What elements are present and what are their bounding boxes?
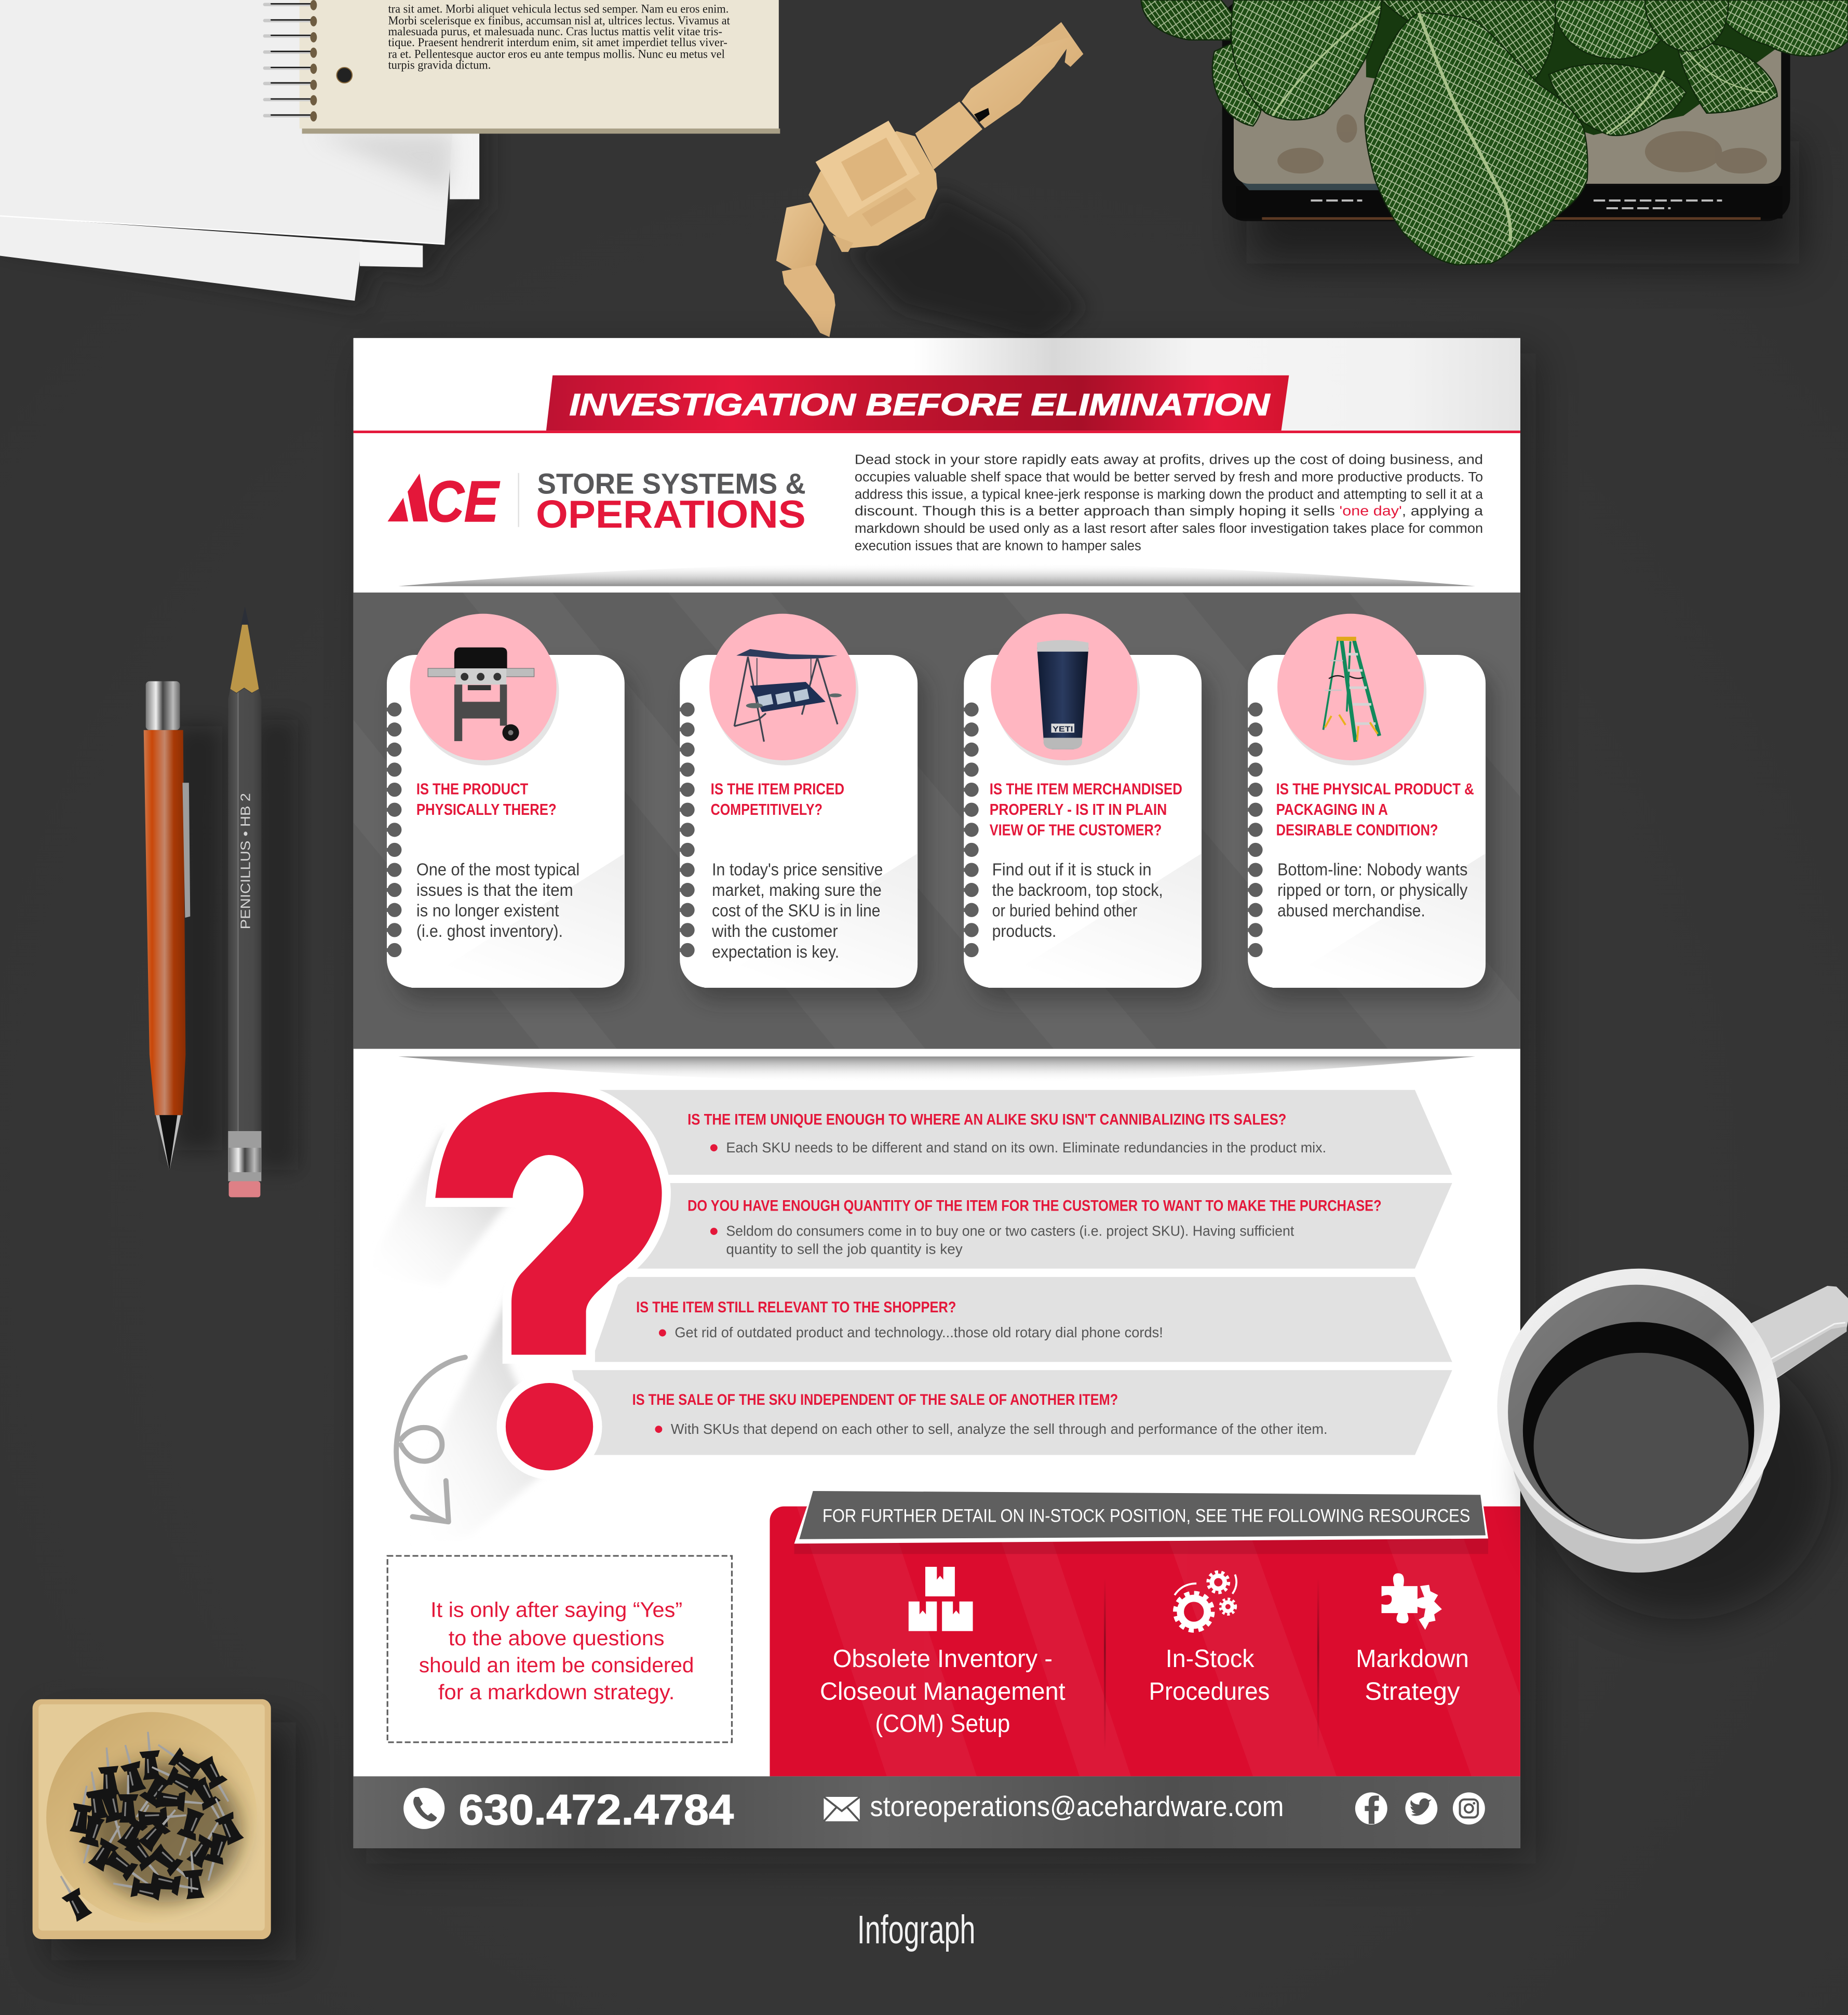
card heading: PROPERLY - IS IT IN PLAIN xyxy=(990,801,1167,818)
question strip 4 xyxy=(572,1370,1452,1455)
grey product panel xyxy=(354,593,1520,1049)
resource: obsolete inventory: (COM) Setup xyxy=(875,1710,1010,1738)
red title banner xyxy=(546,375,1289,431)
graphite pencil xyxy=(228,607,298,1197)
red rule xyxy=(354,431,1520,433)
large red question mark xyxy=(435,1092,662,1470)
icon: puzzle piece with gear arrow xyxy=(1382,1573,1429,1623)
question strip 2: Seldom do consumers come in to buy one or two casters (i.e. project SKU). Having sufficient xyxy=(726,1223,1294,1239)
icon: envelope xyxy=(824,1797,860,1821)
question strip 3: Get rid of outdated product and technology...those old rotary dial phone cords! xyxy=(675,1324,1163,1340)
dashed callout box: to the above questions xyxy=(449,1626,665,1650)
intro paragraph: execution issues that are known to hamper sales xyxy=(855,538,1141,553)
stack of loose white paper sheets xyxy=(0,0,488,308)
question mark long shadow xyxy=(362,1131,552,1549)
question strip 1: Each SKU needs to be different and stand on its own. Eliminate redundancies in the product mix. xyxy=(726,1139,1326,1156)
resource: in-stock procedures: In-Stock xyxy=(1166,1645,1255,1673)
card heading: COMPETITIVELY? xyxy=(711,801,822,818)
card text: is no longer existent xyxy=(416,902,559,921)
binder holes xyxy=(964,703,979,957)
spiral notebook: tique. Praesent hendrerit interdum enim, sit amet imperdiet tellus viver- xyxy=(388,36,727,49)
contact footer bar xyxy=(354,1776,1520,1848)
question strip 1 xyxy=(596,1090,1452,1175)
card text: cost of the SKU is in line xyxy=(712,902,880,921)
orange mechanical pencil xyxy=(144,681,222,1171)
card text: In today's price sensitive xyxy=(712,860,883,879)
card text: the backroom, top stock, xyxy=(992,881,1163,900)
wooden mannequin arm xyxy=(776,22,1086,344)
resource: obsolete inventory xyxy=(820,1567,1065,1738)
dashed callout box xyxy=(387,1556,732,1742)
card text: with the customer xyxy=(711,922,838,941)
resource: obsolete inventory: Closeout Management xyxy=(820,1677,1065,1705)
graphite pencil: PENICILLUS • HB 2 xyxy=(237,793,253,929)
icon: phone xyxy=(403,1788,444,1829)
icon: twitter xyxy=(1405,1792,1437,1824)
card heading xyxy=(711,781,844,818)
card heading xyxy=(416,781,557,818)
icon: insulated tumbler xyxy=(1037,640,1088,749)
ACE logo and department name xyxy=(387,467,806,536)
question strip 4: With SKUs that depend on each other to sell, analyze the sell through and performance of the other item. xyxy=(671,1421,1328,1437)
poster drop shadow xyxy=(366,354,1536,1864)
card text xyxy=(711,860,883,962)
card text xyxy=(992,860,1163,941)
question strip 3 xyxy=(591,1277,1452,1362)
card heading: VIEW OF THE CUSTOMER? xyxy=(990,822,1162,839)
icon: facebook xyxy=(1355,1792,1387,1824)
icon: instagram xyxy=(1453,1792,1485,1824)
wooden tray with push pins xyxy=(33,1699,295,1960)
card heading: IS THE PHYSICAL PRODUCT & xyxy=(1276,781,1474,798)
card text: market, making sure the xyxy=(712,881,882,900)
icon: stacked boxes xyxy=(909,1567,973,1631)
phone number: 630.472.4784 xyxy=(459,1785,734,1834)
card heading: IS THE ITEM MERCHANDISED xyxy=(990,781,1182,798)
spiral notebook: turpis gravida dictum. xyxy=(388,58,491,71)
coffee mug xyxy=(1497,1269,1848,1619)
card heading: IS THE ITEM PRICED xyxy=(711,781,844,798)
header band xyxy=(354,338,1520,433)
Infograph caption: Infograph xyxy=(857,1908,975,1952)
question strip 2: DO YOU HAVE ENOUGH QUANTITY OF THE ITEM FOR THE CUSTOMER TO WANT TO MAKE THE PURCHASE? xyxy=(687,1197,1382,1214)
card text: One of the most typical xyxy=(416,860,579,879)
curved shadow above grey panel xyxy=(398,563,1475,586)
intro paragraph: Dead stock in your store rapidly eats away at profits, drives up the cost of doing business, and xyxy=(855,451,1483,467)
question strip 1: IS THE ITEM UNIQUE ENOUGH TO WHERE AN ALIKE SKU ISN'T CANNIBALIZING ITS SALES? xyxy=(687,1111,1286,1129)
card heading: PACKAGING IN A xyxy=(1276,801,1388,818)
divider lines in resources panel xyxy=(1104,1578,1319,1751)
curling arrow doodle xyxy=(396,1358,465,1522)
binder holes xyxy=(387,703,401,957)
poster sheet xyxy=(354,338,1520,1848)
intro paragraph: markdown should be used only as a last resort after sales floor investigation takes place for common xyxy=(855,520,1483,536)
card text: or buried behind other xyxy=(992,902,1137,921)
curved shadow below grey panel xyxy=(398,1056,1475,1082)
ACE logo and department name: OPERATIONS xyxy=(536,492,806,536)
card text: abused merchandise. xyxy=(1277,902,1425,921)
resource: obsolete inventory: Obsolete Inventory - xyxy=(833,1645,1053,1673)
binder holes xyxy=(1248,703,1263,957)
ACE logo and department name: CE xyxy=(427,469,501,534)
red resources panel xyxy=(770,1507,1520,1776)
title: INVESTIGATION BEFORE ELIMINATION xyxy=(569,387,1271,422)
card text: issues is that the item xyxy=(416,881,573,900)
spiral notebook: malesuada purus, et malesuada nunc. Cras luctus mattis velit vitae tris- xyxy=(388,25,722,38)
intro paragraph: address this issue, a typical knee-jerk response is marking down the product and attempting to sell it at a xyxy=(855,486,1483,502)
card text xyxy=(1277,860,1468,921)
card: is the packaging in a desirable condition xyxy=(1248,614,1494,1001)
card text: (i.e. ghost inventory). xyxy=(416,922,563,941)
question strip 2: quantity to sell the job quantity is key xyxy=(726,1241,963,1257)
resources header tag: FOR FURTHER DETAIL ON IN-STOCK POSITION, SEE THE FOLLOWING RESOURCES xyxy=(822,1505,1470,1526)
icon: insulated tumbler: YETI xyxy=(1053,725,1073,733)
card text: Bottom-line: Nobody wants xyxy=(1277,860,1467,879)
resource: in-stock procedures: Procedures xyxy=(1149,1677,1270,1705)
resource: markdown strategy xyxy=(1356,1573,1469,1705)
spiral notebook xyxy=(265,0,780,133)
dashed callout box: should an item be considered xyxy=(419,1653,694,1677)
card heading xyxy=(1276,781,1474,839)
binder holes xyxy=(680,703,695,957)
card text: expectation is key. xyxy=(712,943,839,962)
question strip 3: IS THE ITEM STILL RELEVANT TO THE SHOPPER? xyxy=(636,1299,956,1316)
ACE logo and department name: STORE SYSTEMS & xyxy=(537,467,806,500)
card: is the product physically there xyxy=(387,614,633,1001)
question strip 2 xyxy=(630,1183,1452,1269)
intro paragraph: occupies valuable shelf space that would be better served by fresh and more productive products. To xyxy=(855,469,1483,485)
resource: markdown strategy: Strategy xyxy=(1365,1677,1460,1705)
dashed callout box: for a markdown strategy. xyxy=(438,1680,675,1704)
card text: Find out if it is stuck in xyxy=(992,860,1152,879)
icon: step ladder xyxy=(1323,637,1379,742)
resource: in-stock procedures xyxy=(1149,1572,1270,1705)
card heading: DESIRABLE CONDITION? xyxy=(1276,822,1438,839)
card text: ripped or torn, or physically xyxy=(1277,881,1468,900)
resource: markdown strategy: Markdown xyxy=(1356,1645,1469,1673)
question strip 4: IS THE SALE OF THE SKU INDEPENDENT OF THE SALE OF ANOTHER ITEM? xyxy=(632,1391,1118,1408)
resources header tag xyxy=(794,1491,1488,1543)
intro paragraph xyxy=(855,451,1483,553)
icon: porch swing xyxy=(734,649,842,742)
card heading: IS THE PRODUCT xyxy=(416,781,529,798)
card text: products. xyxy=(992,922,1056,941)
email address: storeoperations@acehardware.com xyxy=(870,1791,1284,1822)
icon: gas grill xyxy=(428,648,534,741)
dashed callout box: It is only after saying “Yes” xyxy=(430,1598,682,1622)
spiral notebook: Morbi scelerisque ex finibus, accumsan nisl at, ultrices lectus. Vivamus at xyxy=(388,14,730,27)
spiral notebook: tra sit amet. Morbi aliquet vehicula lectus sed semper. Nam eu eros enim. xyxy=(388,3,729,16)
card heading xyxy=(990,781,1182,839)
card heading: PHYSICALLY THERE? xyxy=(416,801,557,818)
card text xyxy=(416,860,579,941)
icon: gears xyxy=(1175,1572,1236,1630)
potted plant xyxy=(1141,0,1848,265)
card: is the item priced competitively xyxy=(680,614,926,1001)
intro paragraph: discount. Though this is a better approach than simply hoping it sells 'one day' , applying a xyxy=(855,503,1483,518)
spiral notebook: ra et. Pellentesque auctor eros eu ante tempus mollis. Nunc eu metus vel xyxy=(388,47,725,60)
card: is the item merchandised properly xyxy=(964,614,1210,1001)
